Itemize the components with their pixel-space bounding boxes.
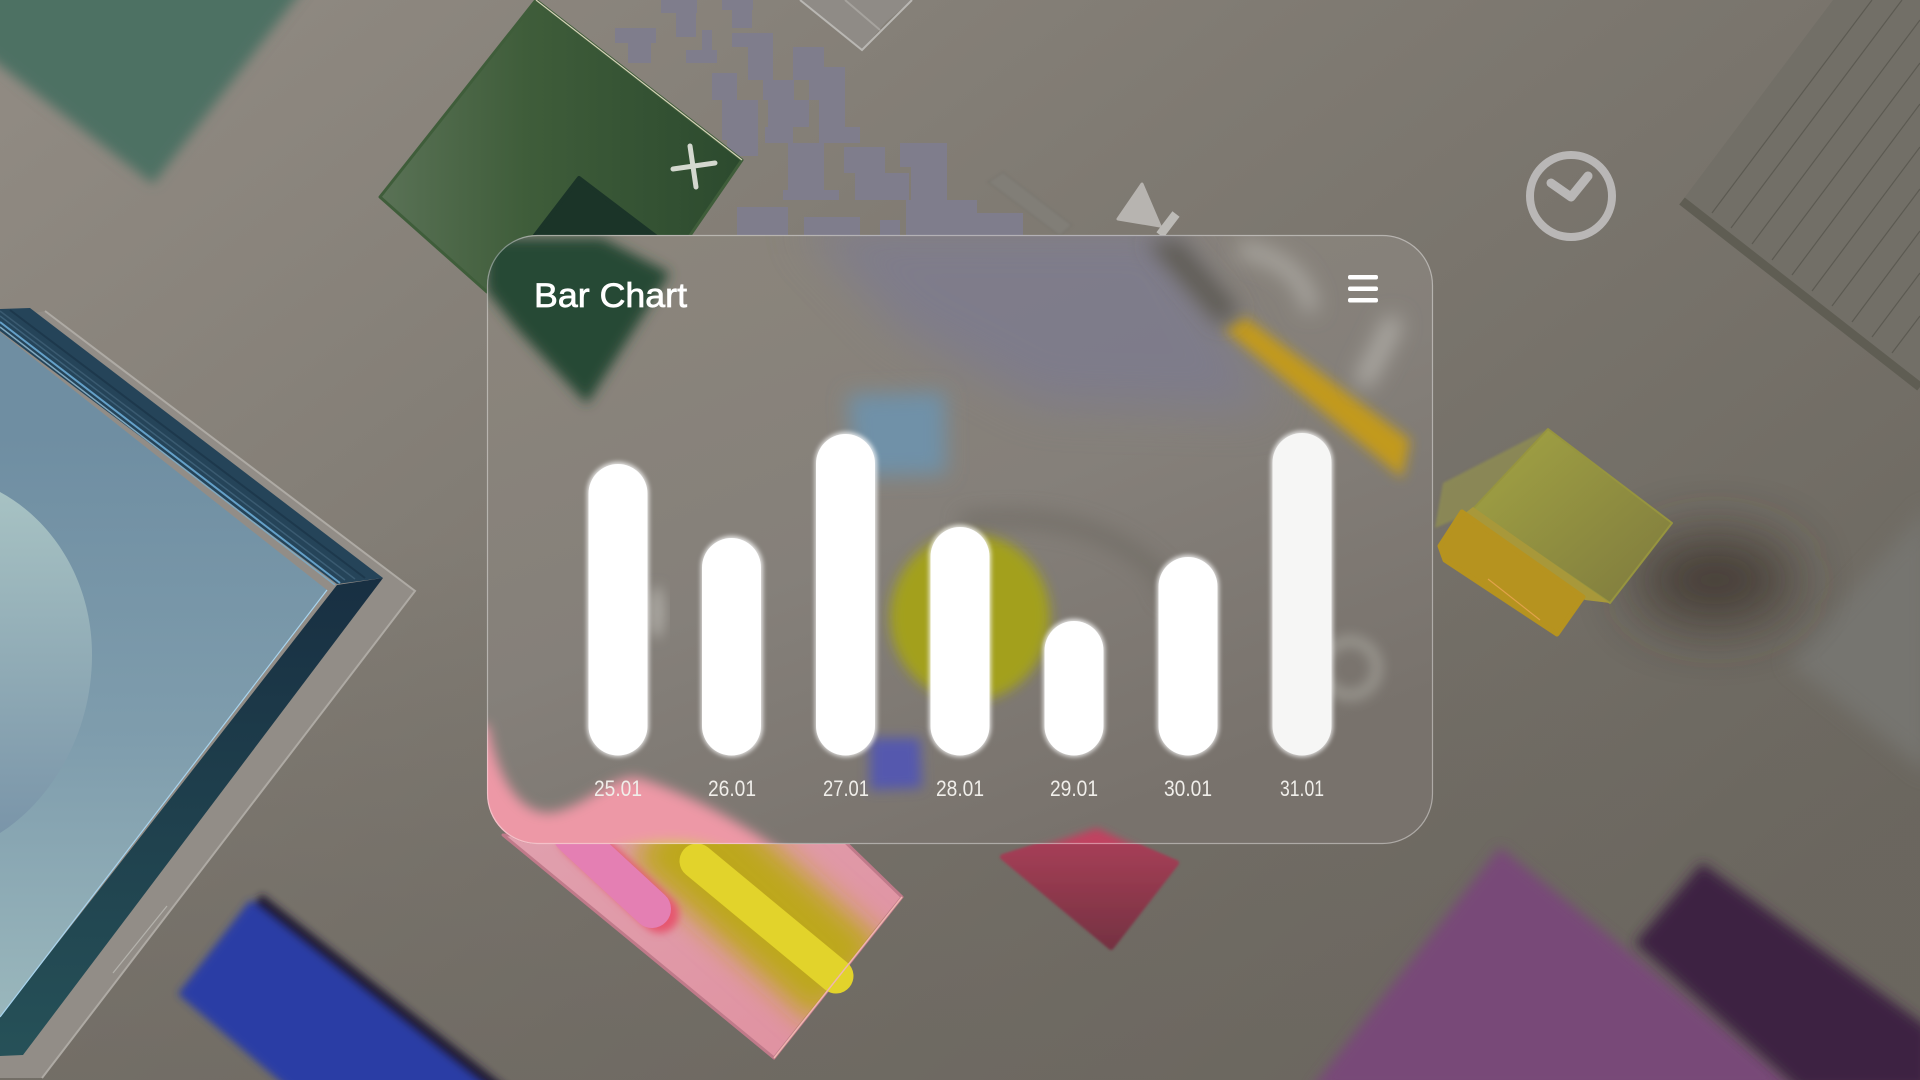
panel background	[470, 225, 1433, 865]
bar date labels: 28.01	[936, 776, 984, 801]
glass stick	[988, 172, 1072, 236]
bar date labels: 31.01	[1280, 776, 1324, 801]
icon: plus	[673, 146, 715, 187]
bar 27.01	[816, 434, 875, 756]
icon: menu	[1348, 275, 1378, 302]
book on glass sheet	[0, 308, 415, 1078]
blurred grey smear	[1147, 240, 1240, 326]
bar 25.01	[588, 464, 648, 756]
blurred yellow circle	[890, 533, 1050, 701]
teal block top left	[0, 0, 310, 184]
bar 28.01	[930, 527, 990, 756]
icon: green square with plus	[380, 0, 742, 292]
title: Bar Chart	[534, 277, 688, 315]
blurred purple square	[870, 738, 922, 790]
yellow stick	[697, 861, 836, 976]
book spine	[0, 578, 383, 1056]
book cover	[0, 332, 327, 1017]
yellow glow	[665, 820, 850, 985]
blurred red block	[1040, 824, 1138, 844]
glass sheet	[0, 311, 415, 1078]
book page stack	[0, 308, 383, 585]
pink stick	[572, 835, 660, 914]
bar date labels: 25.01	[594, 776, 642, 801]
panel: frosted glass bar chart card	[470, 225, 1433, 865]
bar date labels: 27.01	[823, 776, 869, 801]
bar glow	[587, 431, 1333, 757]
blurred blue square	[848, 392, 946, 476]
bar 26.01	[702, 538, 761, 756]
blurred pink corner	[487, 720, 784, 844]
bar date labels: 26.01	[708, 776, 756, 801]
blurred yellow stick	[1224, 317, 1410, 478]
dark purple block	[1635, 863, 1920, 1080]
blurred grey arc	[968, 511, 1158, 578]
glass block top centre	[800, 0, 912, 50]
cube shadow	[1635, 538, 1795, 622]
blurred top right highlights	[1245, 250, 1392, 378]
pink slab	[503, 820, 902, 1058]
cube lip	[1464, 507, 1610, 603]
red block	[1003, 828, 1176, 947]
right grey block	[1788, 505, 1920, 775]
bar 30.01	[1158, 557, 1218, 756]
blue block	[178, 894, 510, 1080]
blurred lilac blob	[836, 236, 1250, 408]
blurred ring	[1323, 641, 1377, 695]
triangle shape	[1118, 184, 1176, 235]
purple block	[1310, 847, 1800, 1080]
panel border	[488, 236, 1432, 844]
bar date labels: 29.01	[1050, 776, 1098, 801]
icon: yellow cube	[1435, 429, 1672, 634]
bar 29.01	[1044, 621, 1104, 756]
bar chart	[587, 431, 1333, 801]
grey striped panel top right	[1682, 0, 1920, 387]
bar date labels: 30.01	[1164, 776, 1212, 801]
bar 31.01	[1272, 433, 1332, 756]
blurred left highlight	[649, 586, 665, 638]
blurred green shape	[486, 238, 670, 404]
lilac pixel pattern	[615, 0, 1023, 237]
bar date labels	[594, 776, 1324, 801]
icon: clock	[1530, 155, 1612, 237]
cover disc	[0, 492, 92, 833]
